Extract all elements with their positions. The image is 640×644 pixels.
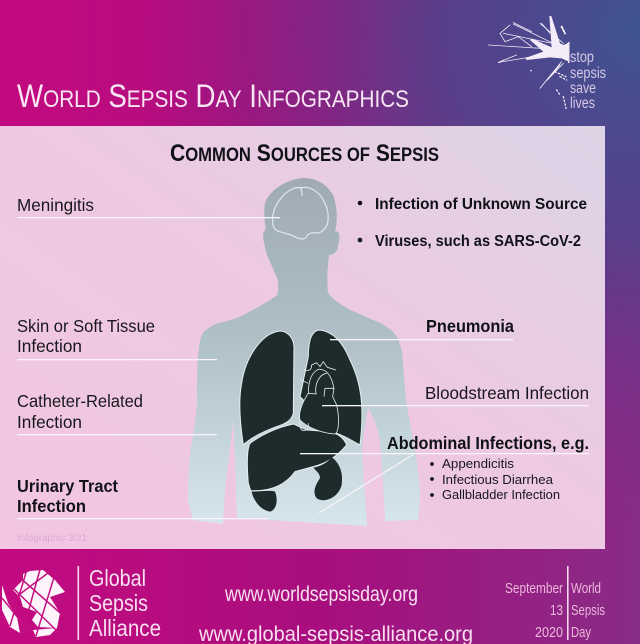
date block: world sepsis day: Day — [571, 625, 592, 641]
date block: world sepsis day — [505, 566, 605, 641]
icon: heart — [300, 362, 338, 434]
date block: world sepsis day: World — [571, 581, 601, 597]
icon: left lung — [240, 331, 294, 445]
label: abdominal infections — [300, 433, 589, 513]
logo text: sepsis — [570, 65, 606, 82]
list: abdominal infections: Gallbladder Infection — [442, 487, 560, 502]
website links: www.worldsepsisday.org — [224, 583, 418, 606]
date block: world sepsis day: 2020 — [535, 625, 563, 641]
label: skin or soft tissue infection: Skin or Soft Tissue — [17, 316, 155, 336]
icon: brain outline — [272, 187, 328, 239]
logo divider — [78, 566, 79, 640]
heading: COMMON SOURCES OF SEPSIS — [170, 140, 439, 167]
label: urinary tract infection — [17, 476, 268, 519]
icon: paint splatter — [488, 16, 569, 108]
label: catheter-related infection — [17, 391, 217, 435]
title: WORLD SEPSIS DAY INFOGRAPHICS — [17, 78, 409, 114]
icon: globe — [2, 566, 66, 640]
label: skin or soft tissue infection — [17, 316, 217, 360]
logo divider — [568, 42, 570, 63]
list: abdominal infections: Infectious Diarrhea — [442, 472, 554, 487]
logo: stop sepsis save lives — [488, 16, 606, 112]
body silhouette — [188, 178, 420, 526]
logo name — [89, 565, 161, 641]
date block: world sepsis day: Sepsis — [571, 603, 605, 619]
label: meningitis: Meningitis — [17, 195, 94, 215]
logo text: save — [570, 80, 596, 97]
organs — [240, 330, 362, 512]
label: catheter-related infection: Catheter-Related — [17, 391, 143, 411]
icon: stomach — [313, 457, 342, 500]
logo text: lives — [570, 95, 595, 112]
list: other sources — [358, 196, 587, 250]
logo text: stop — [570, 49, 594, 66]
label: urinary tract infection: Urinary Tract — [17, 476, 118, 496]
label: catheter-related infection: Infection — [17, 412, 82, 432]
label: bloodstream infection: Bloodstream Infection — [425, 383, 589, 403]
website links — [198, 583, 473, 644]
logo name: Alliance — [89, 615, 161, 641]
label: urinary tract infection: Infection — [17, 496, 86, 516]
list: abdominal infections: Appendicitis — [442, 456, 515, 471]
label: pneumonia: Pneumonia — [426, 316, 514, 336]
date block: world sepsis day: 13 — [550, 603, 563, 619]
logo: global sepsis alliance — [2, 565, 161, 641]
caption: infographic number: Infographic 3/21 — [17, 532, 87, 544]
logo name: Sepsis — [89, 590, 148, 616]
icon: lower organ — [252, 491, 277, 512]
logo name: Global — [89, 565, 146, 591]
date block: world sepsis day: September — [505, 581, 563, 597]
list: other sources: Viruses, such as SARS-CoV-2 — [375, 233, 581, 250]
icon: right lung — [300, 330, 362, 445]
label: skin or soft tissue infection: Infection — [17, 336, 82, 356]
list: abdominal infections — [430, 456, 560, 502]
panel: common sources of sepsis — [0, 126, 605, 549]
label: abdominal infections: Abdominal Infections, e.g. — [387, 433, 589, 453]
icon: liver — [247, 424, 347, 491]
list: other sources: Infection of Unknown Source — [375, 196, 587, 213]
logo text — [570, 49, 606, 112]
